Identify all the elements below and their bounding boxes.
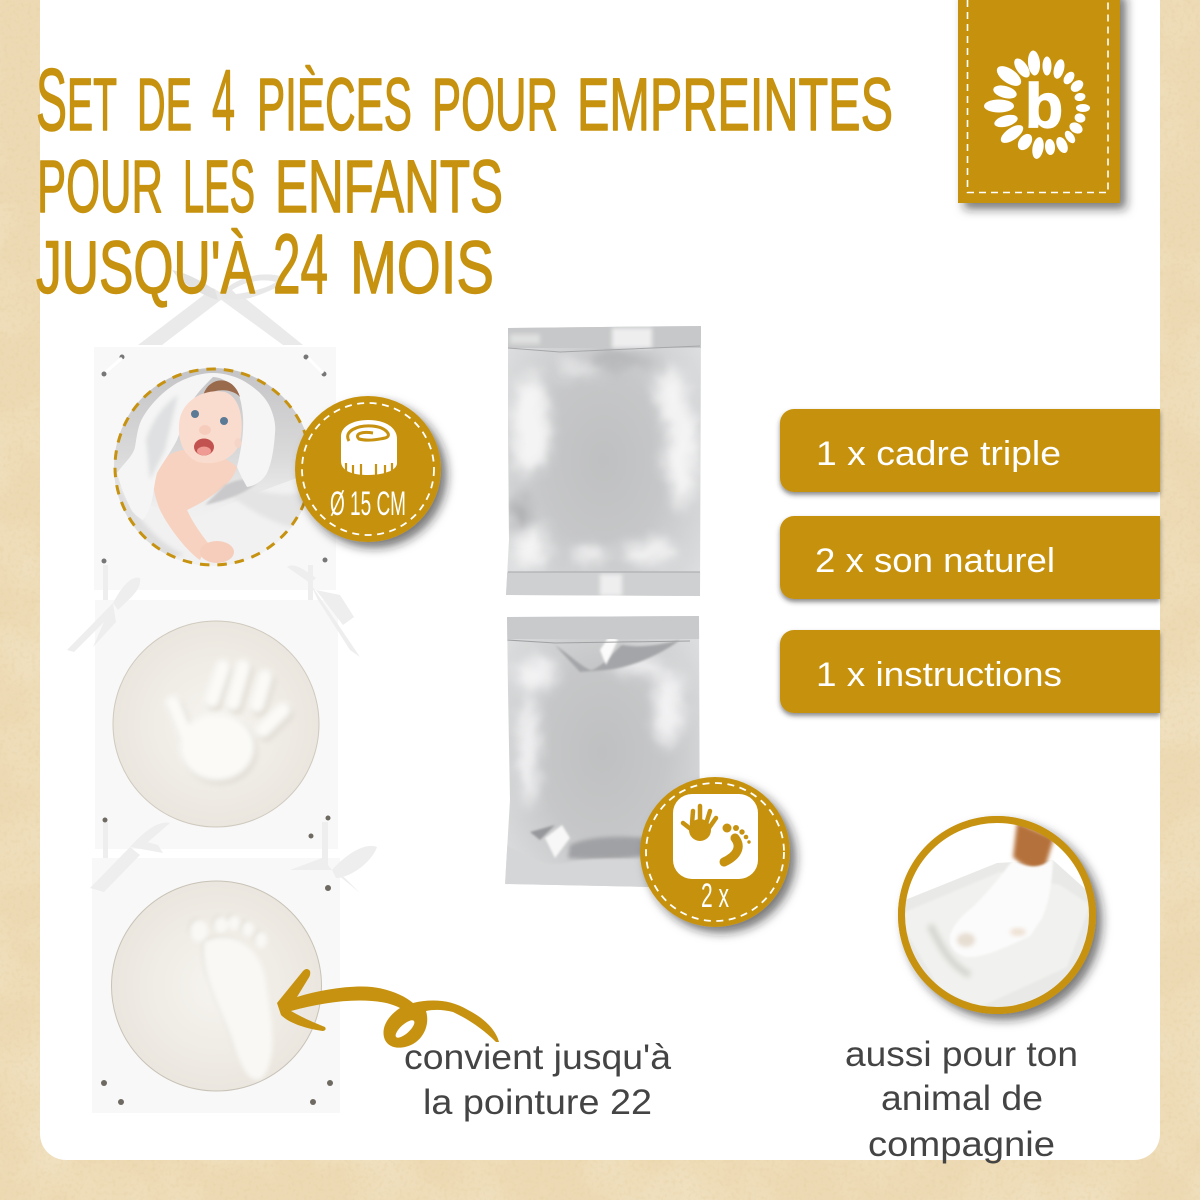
icon: flower logo bbox=[984, 50, 1090, 160]
hair bbox=[203, 380, 240, 397]
badge: diameter 15 cm: Ø 15 CM bbox=[330, 485, 406, 523]
ribbon bows between frame panels bbox=[67, 565, 377, 893]
caption: pets bbox=[845, 1035, 1078, 1164]
pill: frame: 1 x cadre triple bbox=[816, 435, 1061, 473]
icon: tape measure bbox=[341, 420, 397, 475]
foil packet 2 bbox=[505, 616, 703, 890]
top ribbon of the frame bbox=[138, 270, 303, 345]
foil packet 1 bbox=[505, 326, 703, 597]
title: 24 bbox=[273, 217, 328, 311]
title: EMPREINTES bbox=[577, 63, 893, 146]
pill: frame bbox=[780, 409, 1160, 492]
pill: instructions bbox=[780, 630, 1160, 713]
towel bbox=[117, 373, 275, 520]
brand logo tag bbox=[958, 0, 1120, 203]
triple frame: foot print panel bbox=[101, 880, 333, 1105]
pill: natural clay: 2 x son naturel bbox=[815, 542, 1055, 580]
badge: two clay packs: 2 x bbox=[701, 877, 729, 915]
title: MOIS bbox=[350, 226, 494, 309]
title: PIÈCES bbox=[257, 63, 412, 146]
caption: pets: animal de bbox=[881, 1079, 1043, 1118]
title: 4 bbox=[212, 53, 235, 149]
caption: pets: compagnie bbox=[868, 1125, 1055, 1164]
eyelets bbox=[102, 354, 328, 564]
caption: shoe size: convient jusqu'à bbox=[404, 1038, 672, 1077]
title: ENFANTS bbox=[275, 145, 503, 228]
badge: two clay packs bbox=[640, 777, 790, 927]
baby photo bbox=[114, 368, 304, 563]
caption: shoe size bbox=[404, 1038, 672, 1122]
foot impression bbox=[188, 914, 272, 1079]
pill: natural clay bbox=[780, 516, 1160, 599]
triple frame: photo panel bbox=[102, 354, 328, 566]
triple frame: hand print panel bbox=[112, 620, 320, 828]
pill: instructions: 1 x instructions bbox=[816, 656, 1062, 694]
title: POUR bbox=[432, 63, 558, 146]
body and arm bbox=[153, 450, 237, 560]
title: POUR bbox=[37, 145, 163, 228]
hand impression bbox=[173, 667, 286, 777]
title: JUSQU'À bbox=[36, 226, 255, 309]
face bbox=[179, 391, 242, 463]
title: SET bbox=[36, 50, 117, 149]
caption: pets: aussi pour ton bbox=[845, 1035, 1078, 1074]
pet paw photo bbox=[898, 816, 1100, 1014]
caption: shoe size: la pointure 22 bbox=[423, 1083, 652, 1122]
badge: diameter 15 cm bbox=[295, 396, 441, 542]
title bbox=[36, 50, 893, 311]
arrow bbox=[277, 969, 499, 1048]
title: DE bbox=[137, 63, 192, 146]
title: LES bbox=[183, 145, 255, 228]
icon: flower logo: b bbox=[1025, 72, 1063, 141]
icon: hand and foot bbox=[683, 806, 751, 862]
